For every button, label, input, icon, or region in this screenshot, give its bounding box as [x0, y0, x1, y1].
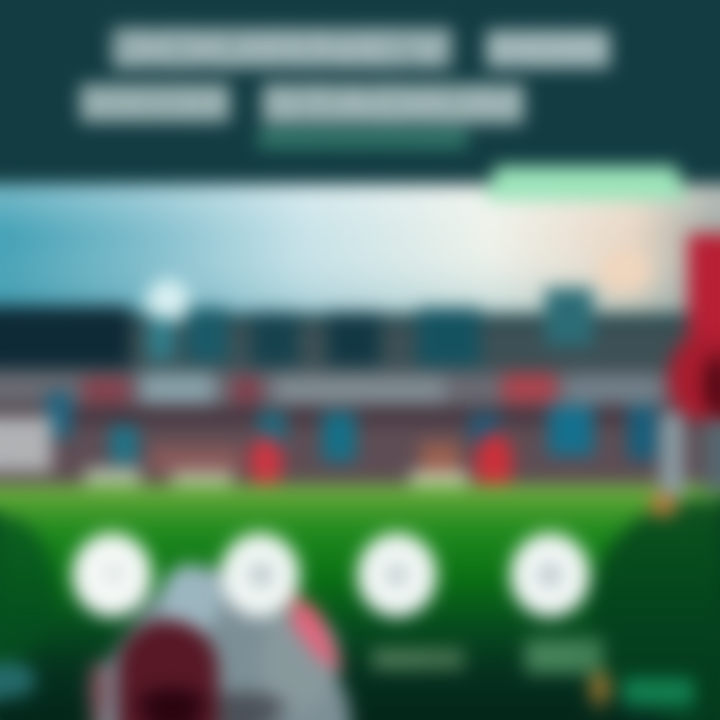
ball pink accent	[292, 592, 344, 672]
title: JOURNEY	[112, 24, 452, 77]
stadium sky	[0, 184, 720, 327]
player in red	[648, 234, 720, 517]
subtitle	[258, 130, 468, 149]
ball white panels	[92, 565, 352, 720]
feature text 4	[525, 638, 603, 674]
pitch	[0, 484, 720, 720]
title: STADIUM	[262, 78, 524, 131]
title	[80, 24, 610, 131]
pitch vignette left	[0, 515, 55, 665]
ball maroon panel	[89, 620, 218, 720]
title: SOCCER	[80, 78, 230, 131]
upper stand	[0, 288, 720, 377]
feature circle 1	[72, 533, 152, 617]
feature text 4: Feature	[525, 649, 579, 666]
middle tier	[0, 372, 720, 494]
feature circle 3	[357, 533, 437, 617]
left teal glow	[0, 662, 36, 698]
green banner	[484, 166, 688, 200]
subtitle: Stadium journey guide	[258, 132, 468, 149]
feature text 3: Feature	[372, 651, 426, 668]
pitch vignette right	[590, 500, 720, 720]
footer logo	[589, 670, 694, 706]
feature circle 2	[220, 533, 300, 617]
title: FOR	[486, 24, 610, 77]
feature text 3	[372, 648, 464, 670]
football	[89, 564, 352, 720]
red players	[249, 432, 513, 496]
feature circle 4	[510, 533, 590, 617]
